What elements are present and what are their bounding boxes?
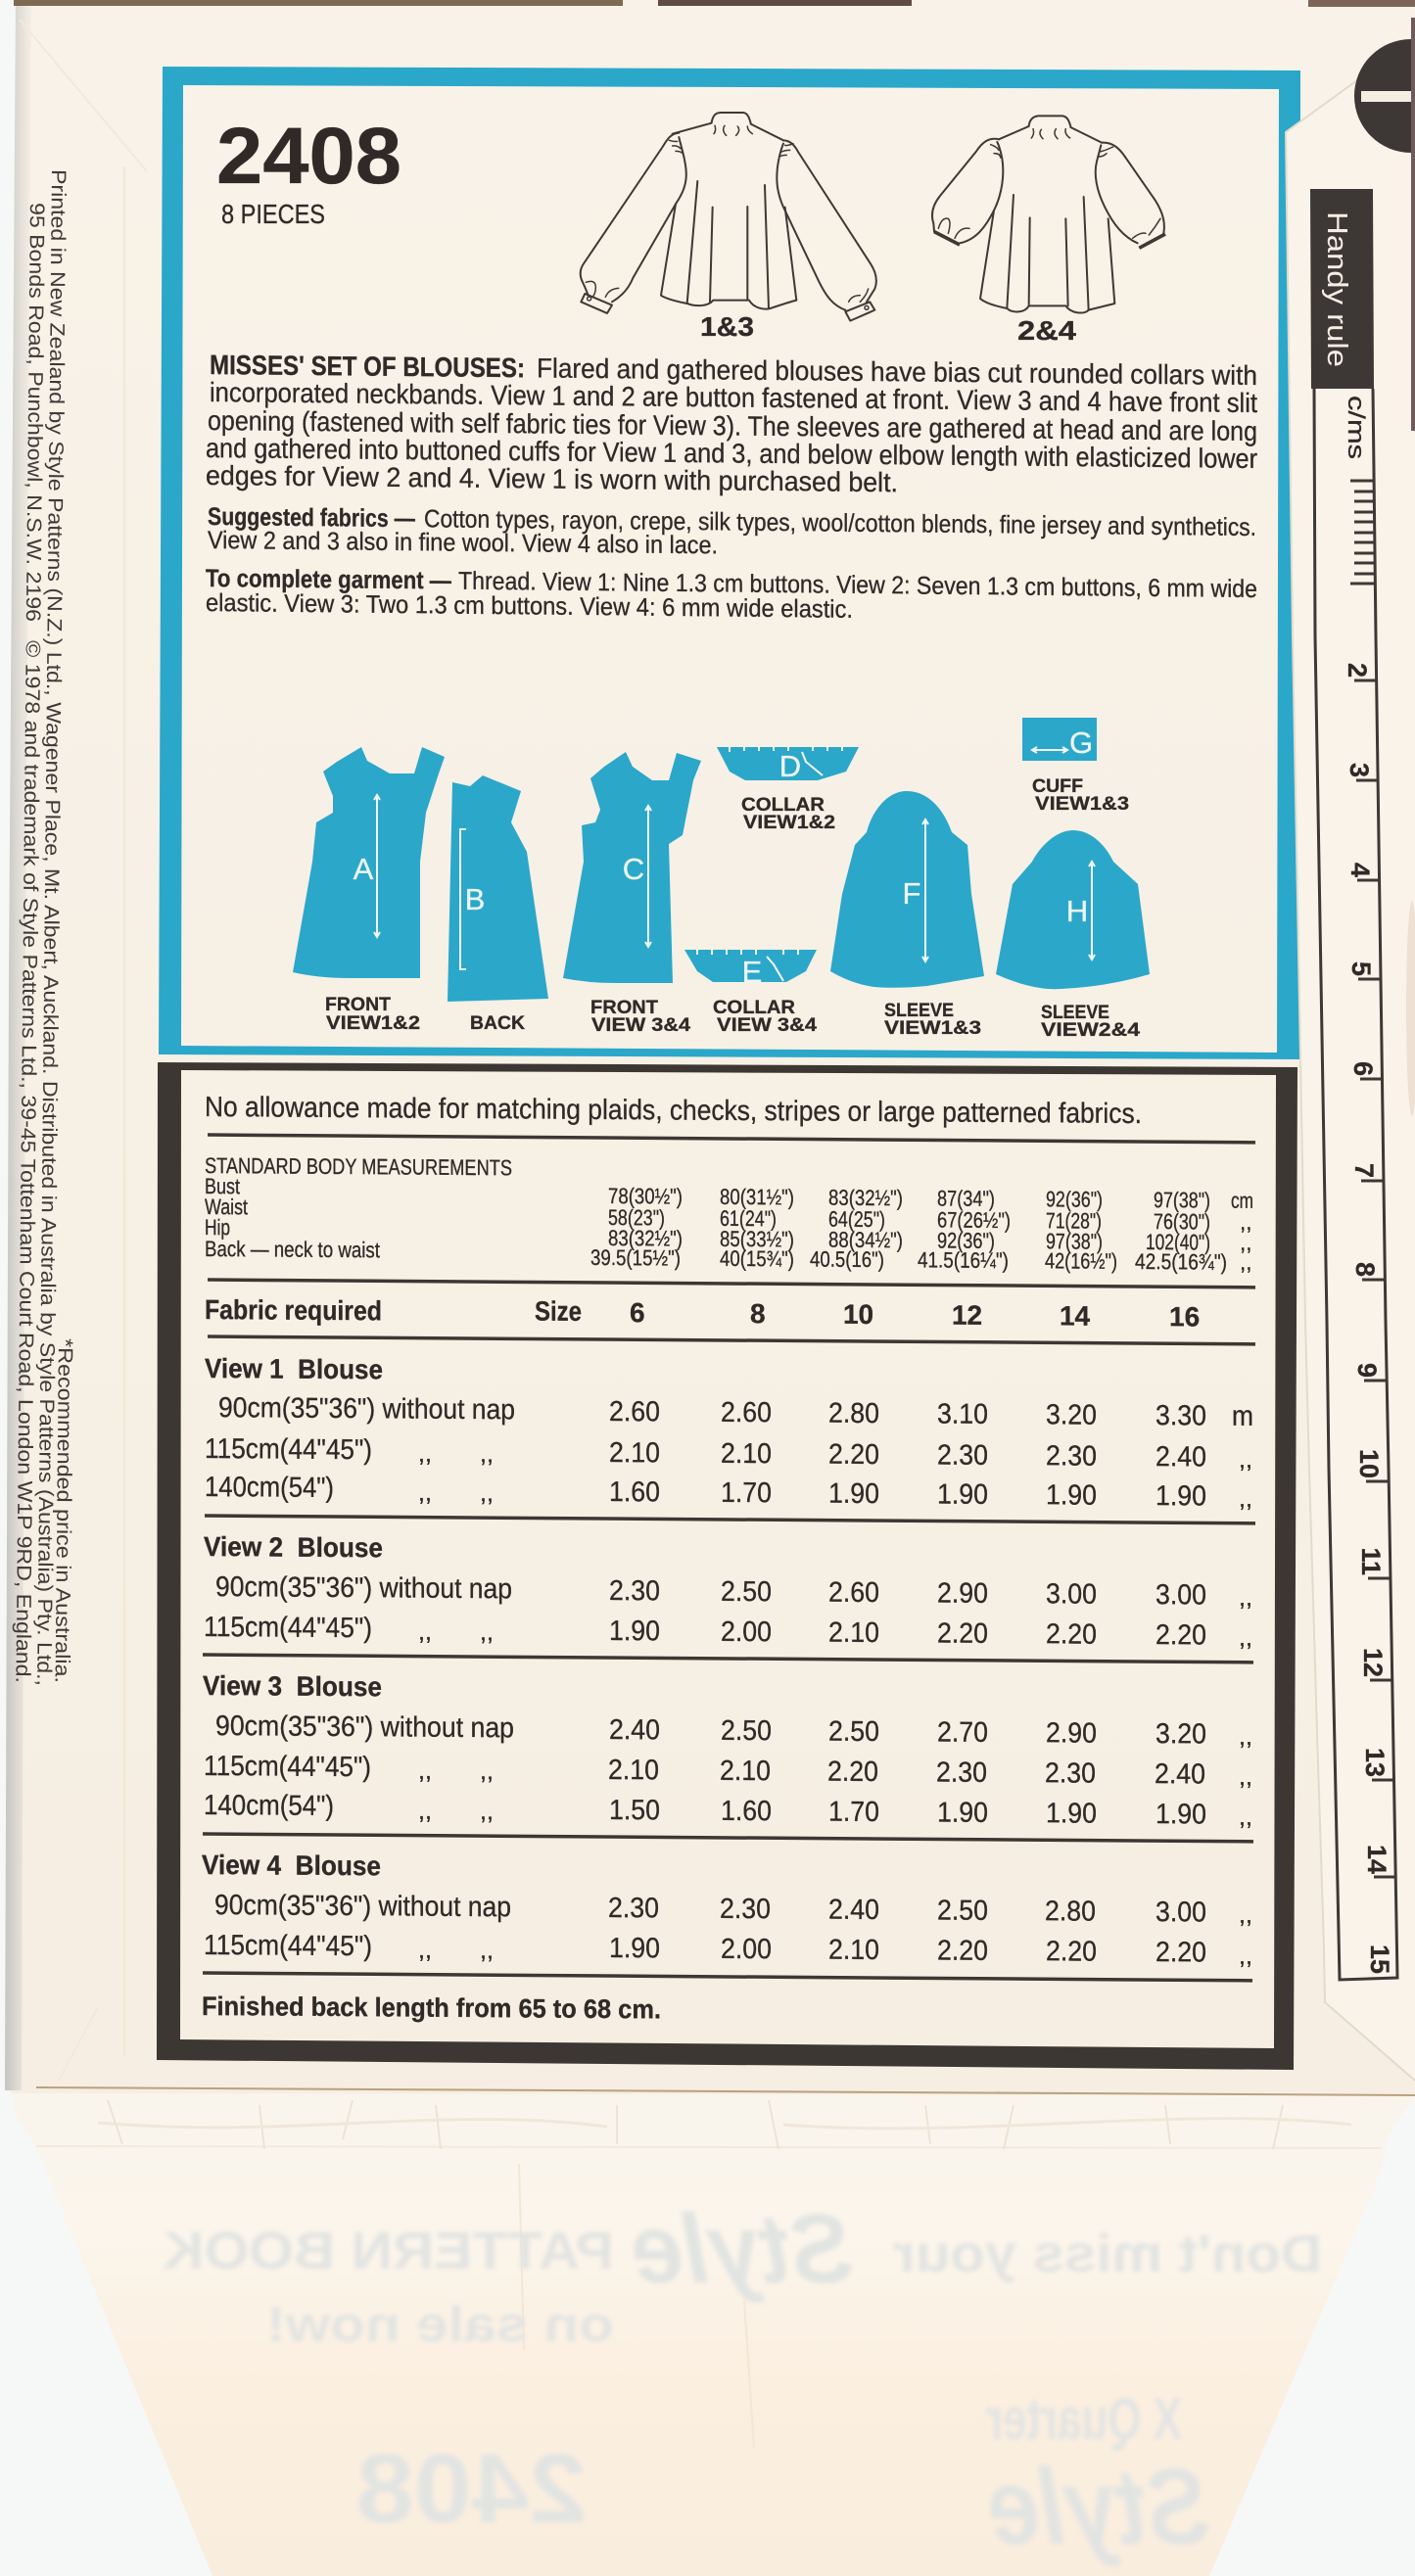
view 2 115cm row: 115cm(44"45") <box>204 1612 372 1644</box>
view 3 90cm row <box>215 1710 1252 1751</box>
pattern piece E collar: E <box>742 955 762 989</box>
view 3 115cm row: 2.30 <box>1045 1757 1096 1790</box>
left margin printer credits <box>11 169 76 1686</box>
view 1 90cm row: m <box>1232 1401 1253 1432</box>
handy rule <box>1310 189 1397 1980</box>
view 1 90cm row: 90cm(35"36") without nap <box>218 1392 515 1426</box>
hip row: 83(32½") <box>608 1226 683 1251</box>
description line 1: Flared and gathered blouses have bias cut rounded collars with <box>537 352 1257 391</box>
hip row: 85(33½") <box>720 1227 794 1251</box>
view 3 90cm row: 2.70 <box>937 1716 988 1749</box>
black framed panel <box>157 1062 1297 2070</box>
credit line 2: 95 Bonds Road, Punchbowl, N.S.W. 2196 © 1978 and trademark of Style Patterns Ltd., 39-45 Tottenham Court Road, London W1P 9RD, England. <box>11 203 48 1683</box>
view 1 90cm row: 2.80 <box>828 1398 879 1429</box>
top torn brown strip <box>14 0 1415 7</box>
view 3 140cm row: 1.90 <box>937 1797 988 1829</box>
view 4 115cm row: 2.00 <box>721 1934 772 1965</box>
suggested fabrics line 1: Cotton types, rayon, crepe, silk types, wool/cotton blends, fine jersey and synthetics. <box>424 505 1256 541</box>
pattern piece A front: A <box>354 852 374 886</box>
view 4 90cm row: 2.40 <box>828 1895 879 1926</box>
pattern piece C front: C <box>623 852 644 886</box>
centimetre numbers: 15 <box>1365 1944 1394 1974</box>
notions line 2: elastic. View 3: Two 1.3 cm buttons. View 4: 6 mm wide elastic. <box>206 589 853 624</box>
back neck to waist row: ,, <box>1240 1250 1252 1275</box>
description line 3: opening (fastened with self fabric ties for View 3). The sleeves are gathered at head and are long <box>208 405 1257 446</box>
row labels: Hip <box>205 1215 230 1240</box>
view 3 115cm row: 2.20 <box>827 1756 878 1788</box>
centimetre numbers: 2 <box>1343 663 1372 678</box>
allowance note: No allowance made for matching plaids, checks, stripes or large patterned fabrics. <box>205 1092 1142 1130</box>
centimetre numbers: 12 <box>1358 1648 1388 1677</box>
view 1 115cm row: 2.10 <box>721 1438 772 1470</box>
row labels: Back — neck to waist <box>205 1237 381 1262</box>
view 3 140cm row: 1.50 <box>609 1795 660 1826</box>
view 3 115cm row: 2.40 <box>1155 1758 1205 1790</box>
view 3 90cm row: 90cm(35"36") without nap <box>215 1710 514 1744</box>
view 1 90cm row: 3.20 <box>1046 1399 1097 1431</box>
waist row <box>608 1205 1252 1235</box>
pattern piece A front <box>293 747 445 978</box>
view 2 115cm row: 1.90 <box>609 1616 660 1647</box>
view 4 115cm row: 2.20 <box>1046 1936 1097 1968</box>
fabric table <box>202 1092 1255 2029</box>
back neck to waist row: 41.5(16¼") <box>918 1247 1009 1273</box>
view 3 115cm row <box>204 1751 1252 1791</box>
ghost show-through text on flap <box>163 2194 1322 2567</box>
view 2 115cm row: ,, <box>480 1618 494 1646</box>
view 3 140cm row: ,, <box>1239 1803 1252 1831</box>
view 1 140cm row: ,, <box>480 1479 494 1507</box>
centimetre numbers: 9 <box>1352 1363 1382 1378</box>
view 4 115cm row: 2.10 <box>828 1935 879 1966</box>
description text <box>206 350 1257 501</box>
view 3 90cm row: 2.50 <box>828 1716 879 1748</box>
rule heading: Handy rule <box>1321 211 1352 367</box>
view 3 140cm row: 1.60 <box>721 1796 772 1827</box>
view 1 140cm row: 140cm(54") <box>205 1472 334 1504</box>
view 3 90cm row: 2.50 <box>721 1715 772 1747</box>
millimetre ticks <box>1350 481 1374 584</box>
fabric required header row: 14 <box>1060 1300 1091 1332</box>
view 1 heading: View 1 Blouse <box>205 1353 383 1384</box>
pattern piece B back <box>448 775 548 1002</box>
view 2 90cm row: 2.30 <box>609 1575 660 1607</box>
back neck to waist row: 40(15¾") <box>720 1246 794 1271</box>
caption sleeve views 1 and 3: SLEEVE <box>884 1001 954 1021</box>
centimetre numbers: 10 <box>1354 1449 1384 1478</box>
view 3 90cm row: 2.90 <box>1046 1717 1097 1750</box>
bust row: 80(31½") <box>720 1185 794 1209</box>
view 2 90cm row: 90cm(35"36") without nap <box>215 1571 512 1605</box>
view 3 section <box>203 1670 1252 1831</box>
caption sleeve views 1 and 3 <box>884 1001 981 1039</box>
view 4 115cm row <box>204 1930 1252 1970</box>
view 3 140cm row: 1.90 <box>1156 1799 1206 1831</box>
caption front views 1 and 2: FRONT <box>325 995 391 1015</box>
bust row: 92(36") <box>1046 1187 1103 1212</box>
view 4 heading: View 4 Blouse <box>202 1850 381 1881</box>
view 1 115cm row: ,, <box>1239 1446 1252 1474</box>
pattern piece F sleeve: F <box>903 876 920 911</box>
view 4 115cm row: 115cm(44"45") <box>204 1930 372 1962</box>
view 2 115cm row: ,, <box>1239 1624 1252 1652</box>
view 3 140cm row: ,, <box>480 1798 494 1825</box>
back neck to waist row <box>590 1245 1252 1275</box>
view 2 section <box>204 1531 1252 1652</box>
caption collar views 3 and 4 <box>713 998 817 1036</box>
view 1 115cm row: ,, <box>480 1440 494 1468</box>
description line 4: and gathered into buttoned cuffs for View 1 and 3, and below elbow length with elasticized lower <box>206 433 1257 474</box>
caption front views 3 and 4: FRONT <box>590 998 658 1018</box>
view 4 90cm row: 3.00 <box>1156 1897 1206 1929</box>
pieces count: 8 PIECES <box>221 199 325 229</box>
view 1 90cm row: 3.30 <box>1156 1400 1206 1432</box>
view 4 90cm row: ,, <box>1239 1901 1252 1929</box>
fabric required header row: 16 <box>1169 1301 1200 1332</box>
view 3 140cm row: 1.70 <box>828 1797 879 1828</box>
view 1 115cm row: 115cm(44"45") <box>205 1433 372 1466</box>
view 4 115cm row: ,, <box>418 1937 432 1964</box>
ghost show-through text on flap: on sale now! <box>266 2297 614 2352</box>
view 1 140cm row: 1.90 <box>1046 1479 1097 1512</box>
ghost show-through text on flap: Style <box>632 2194 853 2304</box>
caption front views 1 and 2: VIEW1&2 <box>326 1013 420 1034</box>
view 1 115cm row: 2.20 <box>828 1439 879 1471</box>
view 4 90cm row: 90cm(35"36") without nap <box>214 1890 511 1923</box>
waist row: 61(24") <box>720 1206 777 1231</box>
to complete garment lead: To complete garment — <box>206 565 451 595</box>
centimetre numbers: 13 <box>1360 1748 1390 1777</box>
bust row: 83(32½") <box>828 1186 903 1210</box>
fabric required header row <box>205 1293 1200 1332</box>
view 3 115cm row: 2.10 <box>608 1755 659 1786</box>
view 1 140cm row: 1.90 <box>937 1478 988 1511</box>
centimetre numbers: 8 <box>1350 1262 1380 1277</box>
view 3 140cm row <box>204 1790 1252 1831</box>
centimetre numbers: 3 <box>1344 763 1374 777</box>
view 2 115cm row: ,, <box>418 1618 432 1646</box>
bust row: cm <box>1231 1189 1253 1213</box>
view 1 115cm row: 2.30 <box>1046 1440 1097 1473</box>
caption cuff <box>1032 776 1129 815</box>
view 2 115cm row: 2.20 <box>937 1617 988 1650</box>
bust row: 87(34") <box>937 1186 995 1211</box>
view 2 115cm row <box>204 1612 1252 1652</box>
view 1 90cm row: 2.60 <box>721 1397 772 1429</box>
row labels: Bust <box>205 1174 241 1198</box>
view 3 heading: View 3 Blouse <box>203 1670 382 1702</box>
view 3 90cm row: 2.40 <box>609 1714 660 1746</box>
view 1 115cm row: 2.10 <box>609 1437 660 1469</box>
view 4 90cm row: 2.80 <box>1045 1896 1096 1928</box>
fabric required header row: Size <box>535 1295 582 1327</box>
view 1 90cm row <box>218 1392 1253 1432</box>
view 2 115cm row: 2.20 <box>1046 1618 1097 1651</box>
back neck to waist row: 40.5(16") <box>810 1247 884 1272</box>
waist row: ,, <box>1240 1210 1252 1235</box>
view 1 90cm row: 3.10 <box>937 1398 988 1430</box>
rule outline <box>1314 389 1397 1980</box>
waist row: 67(26½") <box>937 1207 1011 1233</box>
view 3 115cm row: 115cm(44"45") <box>204 1751 371 1783</box>
centimetre numbers: 5 <box>1346 961 1376 976</box>
caption cuff: CUFF <box>1032 776 1083 797</box>
pattern piece G cuff: G <box>1069 726 1093 760</box>
fabric required header row: 6 <box>630 1297 645 1328</box>
view 2 90cm row: 2.50 <box>721 1576 772 1608</box>
view 4 115cm row: 1.90 <box>609 1933 660 1964</box>
view 1 115cm row: 2.30 <box>937 1439 988 1472</box>
view 4 115cm row: 2.20 <box>937 1935 988 1967</box>
view 1 140cm row: ,, <box>1239 1485 1252 1513</box>
waist row: 71(28") <box>1046 1208 1102 1234</box>
black circle at top right <box>1354 18 1415 431</box>
pattern piece H sleeve <box>996 830 1150 989</box>
fabric required header row: 12 <box>952 1300 982 1331</box>
pattern piece B back: B <box>465 882 485 916</box>
waist row: 64(25") <box>828 1207 885 1232</box>
caption collar views 3 and 4: VIEW 3&4 <box>717 1015 817 1036</box>
finished back length note: Finished back length from 65 to 68 cm. <box>202 1991 661 2024</box>
caption collar views 3 and 4: COLLAR <box>713 998 795 1018</box>
caption collar views 1 and 2 <box>741 795 835 833</box>
ghost show-through text on flap: Don't miss your <box>893 2225 1322 2283</box>
view 1 90cm row: 2.60 <box>609 1396 660 1428</box>
ghost show-through text on flap: Style <box>988 2447 1209 2567</box>
suggested fabrics lead: Suggested fabrics — <box>208 503 415 533</box>
notions line 1: Thread. View 1: Nine 1.3 cm buttons. View 2: Seven 1.3 cm buttons, 6 mm wide <box>458 568 1257 603</box>
piece captions <box>325 776 1141 1041</box>
description line 2: incorporated neckbands. View 1 and 2 are button fastened at front. View 3 and 4 have front slit <box>210 377 1257 418</box>
caption cuff: VIEW1&3 <box>1035 794 1129 815</box>
centimetre numbers <box>1343 663 1394 1974</box>
measurements heading: STANDARD BODY MEASUREMENTS <box>205 1153 512 1180</box>
view 2 115cm row: 2.00 <box>721 1616 772 1648</box>
ghost show-through text on flap: 2408 <box>356 2434 587 2544</box>
row labels: Waist <box>205 1194 249 1219</box>
caption sleeve views 2 and 4: SLEEVE <box>1041 1003 1109 1023</box>
centimetre numbers: 11 <box>1356 1547 1386 1575</box>
view 3 90cm row: ,, <box>1239 1723 1252 1751</box>
view 2 heading: View 2 Blouse <box>204 1531 383 1563</box>
view 2 90cm row: ,, <box>1239 1584 1252 1612</box>
view 4 90cm row <box>214 1890 1252 1929</box>
view 2 115cm row: 2.20 <box>1156 1619 1206 1652</box>
centimetre numbers: 14 <box>1362 1845 1391 1874</box>
hip row: 97(38") <box>1046 1229 1103 1254</box>
view 3 115cm row: ,, <box>480 1757 494 1785</box>
back neck to waist row: 39.5(15½") <box>590 1245 681 1271</box>
hip row: 92(36") <box>937 1228 995 1253</box>
view 4 115cm row: 2.20 <box>1156 1937 1206 1969</box>
view 4 90cm row: 2.30 <box>608 1893 659 1924</box>
centimetre numbers: 7 <box>1349 1163 1379 1178</box>
to complete garment <box>206 565 1257 628</box>
caption sleeve views 1 and 3: VIEW1&3 <box>884 1018 981 1039</box>
view 3 140cm row: 140cm(54") <box>204 1790 334 1822</box>
back neck to waist row: 42.5(16¾") <box>1135 1249 1227 1275</box>
view 3 140cm row: 1.90 <box>1046 1798 1097 1830</box>
caption front views 3 and 4: VIEW 3&4 <box>591 1015 690 1036</box>
fabric required header row: 10 <box>843 1299 873 1330</box>
view 2 115cm row: 2.10 <box>828 1617 879 1649</box>
ghost show-through text on flap: X Quarter <box>986 2386 1182 2452</box>
unit label: c/ms <box>1343 396 1369 459</box>
view 3 115cm row: ,, <box>1239 1763 1252 1791</box>
centimetre numbers: 6 <box>1348 1061 1378 1076</box>
view 4 115cm row: ,, <box>480 1937 494 1964</box>
centimetre ticks <box>1354 680 1396 1877</box>
view 3 115cm row: 2.30 <box>936 1756 987 1789</box>
caption front views 1 and 2 <box>325 995 420 1034</box>
caption back: BACK <box>470 1013 525 1034</box>
view label 1 and 3: 1&3 <box>700 311 754 342</box>
pattern piece C front <box>563 752 701 983</box>
bust row <box>608 1184 1253 1213</box>
pattern piece E collar <box>684 950 817 989</box>
view 2 90cm row <box>215 1571 1252 1612</box>
description line 5: edges for View 2 and 4. View 1 is worn with purchased belt. <box>206 460 898 497</box>
view 1 140cm row: 1.90 <box>828 1478 879 1510</box>
caption collar views 1 and 2: VIEW1&2 <box>743 813 835 833</box>
view 3 115cm row: ,, <box>418 1757 432 1785</box>
view 4 90cm row: 2.50 <box>937 1895 988 1927</box>
bottom flap <box>14 2087 1415 2576</box>
hip row: 102(40") <box>1146 1230 1210 1255</box>
caption sleeve views 2 and 4: VIEW2&4 <box>1041 1020 1141 1041</box>
view 4 115cm row: ,, <box>1239 1943 1252 1970</box>
credit line 1: Printed in New Zealand by Style Patterns (N.Z.) Ltd., Wagener Place, Mt. Albert, Auckland. Distributed in Australia by Style Patterns (Australia) Pty. Ltd., <box>32 169 70 1686</box>
view 1 140cm row: 1.60 <box>609 1476 660 1508</box>
waist row: 58(23") <box>608 1205 665 1230</box>
caption front views 3 and 4 <box>590 998 690 1036</box>
view 2 90cm row: 3.00 <box>1046 1578 1097 1611</box>
bust row: 78(30½") <box>608 1184 683 1209</box>
pattern piece D collar: D <box>779 749 801 783</box>
blue framed panel <box>159 67 1300 1059</box>
view 3 90cm row: 3.20 <box>1156 1718 1206 1751</box>
hip row: 88(34½") <box>828 1228 903 1252</box>
view 2 90cm row: 2.60 <box>828 1577 879 1609</box>
view 4 90cm row: 2.30 <box>720 1894 771 1925</box>
description lead: MISSES' SET OF BLOUSES: <box>210 350 525 383</box>
view 1 115cm row: ,, <box>418 1440 432 1468</box>
garment drawing views 1 and 3 <box>581 113 876 321</box>
view 1 115cm row: 2.40 <box>1156 1441 1206 1474</box>
view 3 115cm row: 2.10 <box>720 1756 771 1787</box>
fabric required header row: Fabric required <box>205 1294 382 1326</box>
fabric required header row: 8 <box>750 1298 766 1329</box>
view 1 140cm row <box>205 1472 1252 1513</box>
recommended price note: *Recommended price in Australia. <box>51 1338 76 1683</box>
pattern piece F sleeve <box>830 791 984 988</box>
pattern piece G cuff <box>1022 718 1097 761</box>
pattern piece D collar <box>717 747 859 783</box>
rule heading <box>1310 189 1374 389</box>
suggested fabrics <box>208 503 1256 565</box>
view 1 140cm row: 1.90 <box>1156 1480 1206 1513</box>
caption sleeve views 2 and 4 <box>1041 1003 1141 1041</box>
row labels <box>205 1174 381 1262</box>
hip row: ,, <box>1240 1231 1252 1255</box>
view 4 section <box>202 1850 1252 1970</box>
body measurements block <box>205 1153 1253 1275</box>
garment drawing views 2 and 4 <box>932 116 1165 312</box>
suggested fabrics line 2: View 2 and 3 also in fine wool. View 4 also in lace. <box>208 527 718 559</box>
view 1 140cm row: 1.70 <box>721 1477 772 1509</box>
view 2 90cm row: 3.00 <box>1156 1579 1206 1612</box>
caption collar views 1 and 2: COLLAR <box>741 795 825 816</box>
bust row: 97(38") <box>1154 1188 1210 1213</box>
centimetre numbers: 4 <box>1345 863 1375 877</box>
ghost show-through text on flap: PATTERN BOOK <box>163 2222 614 2280</box>
handy rule side flap <box>1286 44 1415 2081</box>
view 1 140cm row: ,, <box>418 1479 432 1507</box>
pattern number: 2408 <box>216 112 401 201</box>
pattern piece H sleeve: H <box>1066 894 1088 928</box>
view 3 140cm row: ,, <box>418 1798 432 1825</box>
waist row: 76(30") <box>1154 1209 1210 1235</box>
hip row <box>608 1226 1252 1255</box>
view 1 section <box>205 1353 1253 1513</box>
back neck to waist row: 42(16½") <box>1045 1248 1117 1274</box>
view 1 115cm row <box>205 1433 1252 1474</box>
view 2 90cm row: 2.90 <box>937 1577 988 1610</box>
view label 2 and 4: 2&4 <box>1017 315 1076 346</box>
